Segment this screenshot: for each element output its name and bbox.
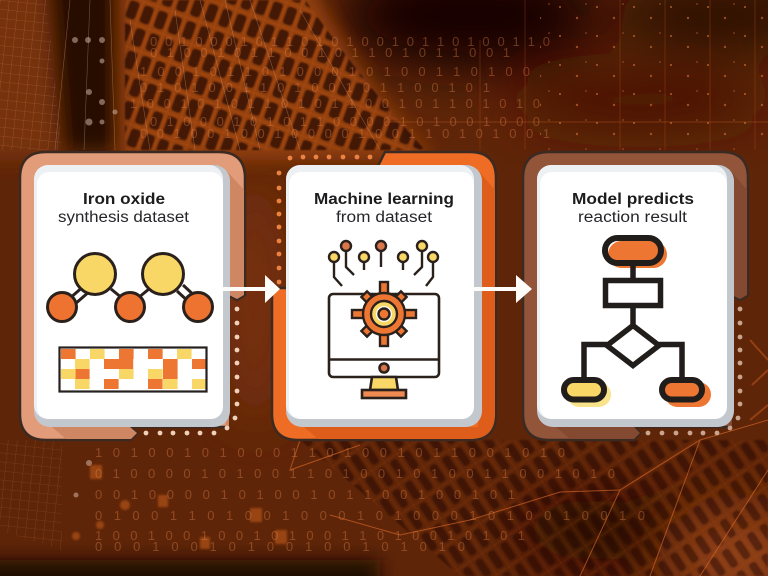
icon: gear: [352, 282, 416, 346]
binary digits: bottom: 0 1 0 0 0 0 1 0 1 0 0 1 1 0 1 0 0 1 0 1 0 0 1 1 0 0 1 0 1 0: [95, 466, 615, 481]
binary digits: top: 1 0 0 1 0 1 1 0 1 0 0 0 1 0 1 0 0 1 1 0 1 0 0: [140, 64, 530, 79]
panel 3 frame: [523, 152, 748, 440]
binary digits: top: [130, 34, 550, 141]
icon: flowchart: [564, 238, 711, 407]
panel 1 card: [34, 165, 230, 427]
binary digits: top: 1 0 0 1 0 1 0 1 1 0 1 0 1 1 0 0 1 0 1 1 0 1 0 1 0: [130, 96, 540, 111]
panel 1 heading: Iron oxide: [83, 191, 165, 208]
panel 1 subheading: synthesis dataset: [58, 209, 190, 226]
panel 1 frame: [20, 152, 245, 440]
panel 2 frame shadow: [304, 170, 495, 439]
binary digits: top: 0 0 1 0 0 0 1 0 1 1 0 1 0 1 0 0 1 0 1 1 0 1 0 0 1 1 0: [150, 34, 550, 49]
binary digits: top: 0 1 0 0 1 0 1 1 0 0 1 0 1 1 0 1 0 1 1 0 0 1: [150, 45, 510, 60]
panel 3: model predicts reaction result: [523, 152, 748, 440]
binary digits: bottom: 0 0 1 0 0 0 0 1 0 1 0 0 1 0 1 1 0 0 1 0 0 1 0 1: [95, 487, 515, 502]
panel 1 dotted trail: [144, 307, 239, 435]
binary digits: top: 0 1 0 0 0 1 0 1 0 1 1 0 0 0 0 1 0 1 0 0 1 0 0 0: [150, 114, 540, 129]
icon: computer monitor: [329, 294, 439, 398]
panel 3 heading: Model predicts: [572, 191, 694, 208]
panel 3 subheading: reaction result: [578, 209, 688, 226]
panel 3 dotted trail: [646, 307, 742, 435]
panel 3 card: [537, 165, 734, 427]
arrow: dataset to machine learning: [223, 275, 280, 303]
panel 3 frame shadow: [556, 170, 747, 439]
icon: data matrix: [60, 348, 206, 392]
binary digits: bottom: 1 0 0 1 0 0 1 0 0 1 0 1 0 0 1 1 0 1 0 0 1 0 1 0 1: [95, 528, 525, 543]
panel 2 dotted trail: [277, 155, 372, 284]
arrow: machine learning to prediction: [473, 275, 532, 303]
panel 1 frame shadow: [52, 170, 244, 439]
panel 2 frame: [272, 152, 496, 440]
icon: iron oxide molecule: [48, 254, 212, 322]
binary digits: bottom: 0 0 0 1 0 0 1 0 1 0 0 1 0 0 1 0 1 0 1 0: [95, 539, 465, 554]
binary digits: bottom: [95, 445, 645, 554]
binary digits: bottom: 1 0 1 0 0 1 0 1 0 0 0 1 1 0 1 0 0 1 0 1 1 0 0 1 0 1 0: [95, 445, 565, 460]
panel 2 heading: Machine learning: [314, 191, 454, 208]
binary digits: top: 0 1 0 1 0 0 1 1 0 1 0 0 1 0 1 1 0 0 1 0 1: [140, 80, 490, 95]
panel 2 subheading: from dataset: [336, 209, 433, 226]
panel 2 card: [286, 165, 482, 427]
panel 2: machine learning from dataset: [272, 152, 496, 440]
icon: circuit nodes: [329, 241, 438, 286]
binary digits: bottom: 0 1 0 0 1 1 0 1 0 0 1 0 0 0 1 0 1 0 0 0 1 0 1 0 0 1 0 0 1 0: [95, 508, 645, 523]
panel 1: iron oxide synthesis dataset: [20, 152, 245, 440]
binary digits: top: 0 0 1 0 0 1 0 0 1 0 0 0 0 1 0 0 1 1 0 1 0 1 0 0 1: [140, 126, 550, 141]
